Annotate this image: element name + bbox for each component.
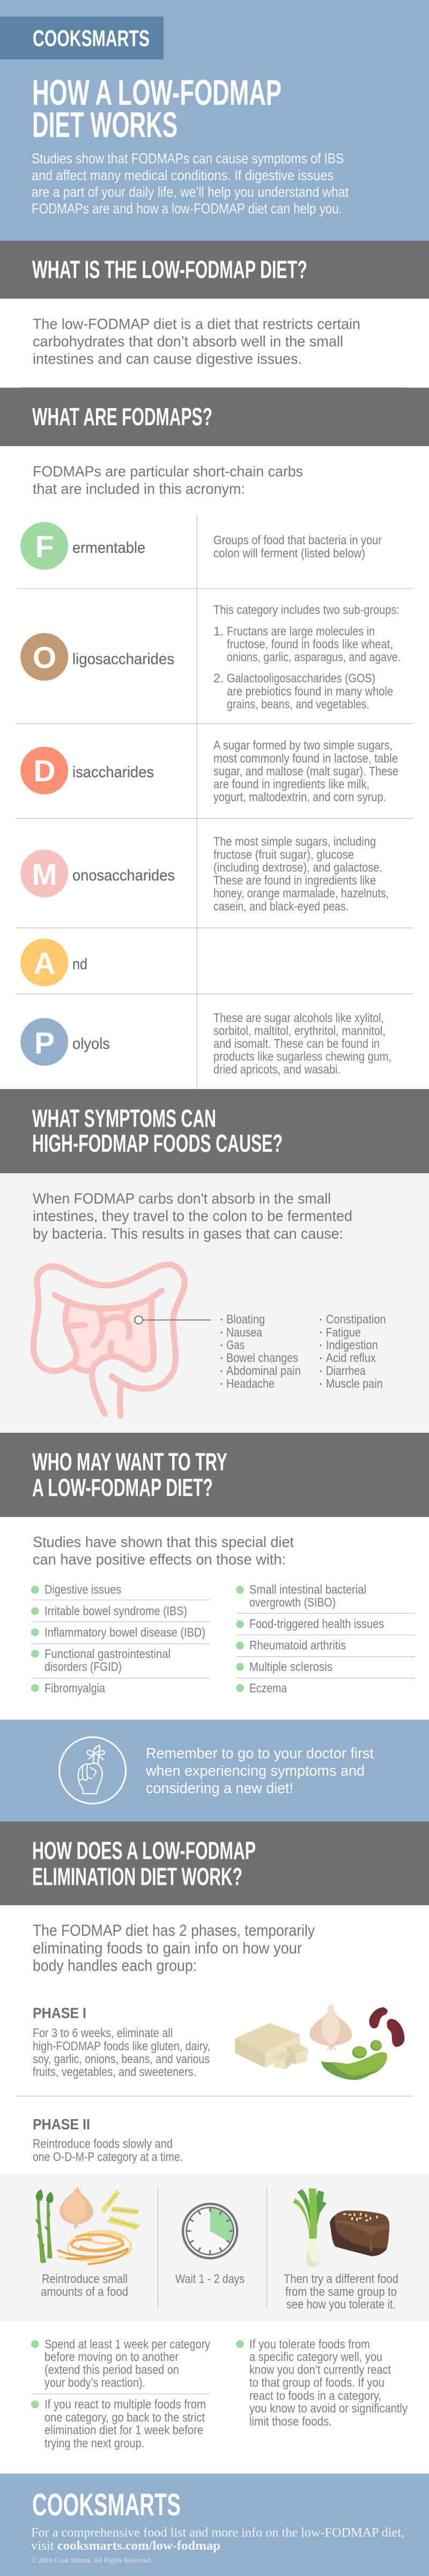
icon: onion: [60, 2186, 93, 2230]
table row: F: Groups of food that bacteria in your: [213, 533, 382, 547]
table row: M: onosaccharides: [72, 867, 175, 884]
table row: P: [20, 1011, 391, 1076]
heading: elimination diet: HOW DOES A LOW-FODMAP: [32, 1837, 256, 1864]
list: conditions right: overgrowth (SIBO): [249, 1595, 336, 1609]
table row: O: grains, beans, and vegetables.: [227, 697, 369, 711]
table row: A: [20, 938, 87, 987]
table row: D: A sugar formed by two simple sugars,: [213, 738, 393, 752]
symptom list: column 2: [320, 1312, 386, 1390]
panel: doctor reminder: [0, 1720, 429, 1822]
intro text: and affect many medical conditions. If digestive issues: [32, 167, 334, 183]
symptom list: column 1: Bloating: [226, 1312, 265, 1326]
text block: definition: [33, 315, 360, 367]
list: phase II tips left: (extend this period based on: [45, 2363, 179, 2377]
list: conditions left: Irritable bowel syndrome (IBS): [45, 1604, 187, 1618]
heading: symptoms: [0, 1089, 429, 1173]
heading: who may want to try: [0, 1433, 429, 1517]
icon: edamame: [321, 2040, 387, 2080]
text block: phase I: soy, garlic, onions, beans, and various: [33, 2052, 210, 2066]
table row: D: yogurt, maltodextrin, and corn syrup.: [213, 790, 386, 804]
text block: two phases: eliminating foods to gain info on how your: [33, 1940, 302, 1957]
table row: O: O: [33, 640, 56, 675]
heading: who may want to try: WHO MAY WANT TO TRY: [32, 1448, 227, 1476]
table row: O: ligosaccharides: [72, 650, 174, 668]
table row: P: sorbitol, maltitol, erythritol, mannitol,: [213, 1024, 386, 1038]
panel: phase II steps: [0, 2174, 429, 2321]
list: conditions right: [236, 1582, 384, 1695]
title: HOW A LOW-FODMAP: [32, 73, 282, 113]
text block: symptoms intro: intestines, they travel to the colon to be fermented: [33, 1208, 352, 1224]
text block: definition: The low-FODMAP diet is a diet that restricts certain: [33, 315, 360, 332]
list: phase II tips right: If you tolerate foods from: [249, 2337, 370, 2351]
illustration: tofu, garlic, beans, edamame: [235, 2004, 404, 2080]
text block: definition: carbohydrates that don’t absorb well in the small: [33, 333, 343, 350]
table row: P: P: [34, 1026, 55, 1061]
list: phase II tips right: you know to avoid or significantly: [249, 2401, 408, 2415]
table row: O: [20, 603, 401, 711]
icon: clock: [183, 2204, 237, 2258]
table row: F: colon will ferment (listed below): [213, 546, 365, 560]
list: conditions right: Food-triggered health issues: [249, 1617, 384, 1631]
text block: phase I: For 3 to 6 weeks, eliminate all: [33, 2026, 173, 2040]
symptom list: column 2: Acid reflux: [326, 1351, 376, 1365]
footer text: [31, 2526, 404, 2565]
text block: two phases: body handles each group:: [33, 1957, 197, 1975]
table row: M: fructose (fruit sugar), glucose: [213, 847, 354, 861]
icon: intestines: [33, 1264, 184, 1416]
intro text: [32, 150, 349, 217]
text block: phase I: PHASE I: [33, 2005, 86, 2022]
heading: elimination diet: [0, 1822, 429, 1905]
heading: symptoms: WHAT SYMPTOMS CAN: [32, 1105, 216, 1132]
list: conditions left: [31, 1582, 205, 1695]
icon: kidney beans: [369, 2007, 404, 2047]
text block: positive effects intro: [33, 1534, 294, 1567]
icon: noodles: [58, 2231, 131, 2264]
text block: definition: intestines and can cause digestive issues.: [33, 351, 302, 367]
text block: two phases: The FODMAP diet has 2 phases, temporarily: [33, 1922, 315, 1940]
table row: M: These are found in ingredients like: [213, 873, 376, 887]
table row: P: olyols: [72, 1035, 110, 1053]
panel: header: [0, 0, 429, 241]
table row: P: products like sugarless chewing gum,: [213, 1049, 391, 1063]
table row: M: The most simple sugars, including: [213, 834, 376, 848]
text block: acronym intro: [33, 463, 303, 497]
symptom list: column 1: Headache: [226, 1376, 275, 1390]
callout line: [135, 1316, 211, 1324]
list: phase II tips left: elimination diet for 1 week before: [45, 2423, 203, 2437]
footer text: © 2018 Cook Smarts. All Rights Reserved.: [31, 2557, 152, 2565]
table row: O: fructose, found in foods like wheat,: [227, 637, 393, 651]
table row: D: D: [33, 754, 56, 788]
intro text: FODMAPs are and how a low-FODMAP diet can help you.: [32, 201, 342, 217]
heading: what are FODMAPs: [0, 388, 429, 446]
table row: D: sugar, and maltose (malt sugar). These: [213, 764, 398, 778]
list: conditions left: Fibromyalgia: [45, 1681, 105, 1695]
list: phase II tips right: to that group of foods. If you: [249, 2375, 384, 2389]
caption: try a different food: see how you tolerate it.: [286, 2297, 396, 2311]
table row: M: honey, orange marmalade, hazelnuts,: [213, 886, 389, 900]
list: conditions right: Rheumatoid arthritis: [249, 1638, 346, 1652]
text block: phase I: [33, 2005, 210, 2078]
table row: O: Fructans are large molecules in: [227, 624, 375, 638]
list: phase II tips right: limit those foods.: [249, 2414, 332, 2428]
footer text: For a comprehensive food list and more info on the low-FODMAP diet,: [31, 2526, 404, 2540]
symptom list: column 1: Abdominal pain: [226, 1364, 301, 1378]
symptom list: column 2: Indigestion: [326, 1338, 378, 1352]
table row: O: are prebiotics found in many whole: [227, 684, 393, 698]
text block: positive effects intro: Studies have shown that this special diet: [33, 1534, 294, 1550]
symptom list: column 1: Gas: [226, 1338, 245, 1352]
list: conditions right: Eczema: [249, 1681, 287, 1695]
text block: reminder: [145, 1745, 374, 1796]
list: phase II tips left: one category, go back to the strict: [45, 2410, 205, 2424]
table row: D: [20, 738, 398, 804]
table row: A: nd: [72, 956, 87, 973]
symptom list: column 2: Diarrhea: [326, 1364, 366, 1378]
table row: P: dried apricots, and wasabi.: [213, 1062, 341, 1076]
table row: O: Galactooligosaccharides (GOS): [227, 671, 375, 685]
table row: F: [20, 522, 382, 569]
text block: reminder: when experiencing symptoms and: [145, 1763, 365, 1779]
icon: asparagus: [36, 2189, 53, 2263]
list: conditions left: disorders (FGID): [45, 1660, 122, 1674]
text block: acronym intro: FODMAPs are particular short-chain carbs: [33, 463, 303, 479]
caption: wait: Wait 1 - 2 days: [175, 2272, 245, 2286]
logo box: [0, 17, 164, 60]
text block: symptoms intro: When FODMAP carbs don't absorb in the small: [33, 1190, 331, 1207]
icon: leek: [293, 2188, 327, 2267]
list: conditions left: Digestive issues: [45, 1582, 121, 1596]
table row: F: ermentable: [72, 539, 145, 557]
table row: F: F: [35, 530, 54, 564]
list: phase II tips right: a specific category well, you: [249, 2350, 382, 2364]
panel: symptoms: [0, 1173, 429, 1433]
text block: phase II: PHASE II: [33, 2116, 90, 2133]
title: DIET WORKS: [32, 105, 177, 145]
caption: try a different food: Then try a different food: [284, 2272, 398, 2286]
table row: P: These are sugar alcohols like xylitol,: [213, 1011, 384, 1025]
table row: M: M: [32, 857, 57, 892]
text block: phase II: one O-D-M-P category at a time.: [33, 2150, 183, 2164]
caption: reintroduce: Reintroduce small: [42, 2272, 128, 2286]
text block: phase II: Reintroduce foods slowly and: [33, 2137, 173, 2151]
icon: bread: [330, 2210, 389, 2256]
heading: elimination diet: ELIMINATION DIET WORK?: [32, 1863, 242, 1891]
table row: M: casein, and black-eyed peas.: [213, 899, 349, 913]
table row: A: A: [33, 946, 56, 981]
caption: reintroduce: [41, 2272, 128, 2298]
table row: O: onions, garlic, asparagus, and agave.: [227, 650, 401, 664]
intro text: Studies show that FODMAPs can cause symptoms of IBS: [32, 150, 344, 166]
list: phase II tips left: trying the next group.: [45, 2436, 144, 2450]
list: phase II tips right: react to foods in a category,: [249, 2388, 381, 2402]
text block: phase I: high-FODMAP foods like gluten, dairy,: [33, 2039, 210, 2053]
logo box: COOKSMARTS: [33, 26, 150, 51]
icon: leek and bread: [293, 2188, 389, 2267]
list: phase II tips left: before moving on to another: [45, 2350, 179, 2364]
heading: who may want to try: A LOW-FODMAP DIET?: [32, 1474, 213, 1501]
text block: phase I: fruits, vegetables, and sweeteners.: [33, 2064, 196, 2078]
list: phase II tips left: If you react to multiple foods from: [45, 2397, 206, 2411]
table row: O: 2.: [213, 671, 224, 685]
list: conditions left: Inflammatory bowel disease (IBD): [45, 1625, 205, 1639]
text block: reminder: Remember to go to your doctor first: [146, 1745, 374, 1761]
text block: positive effects intro: can have positive effects on those with:: [33, 1551, 286, 1567]
icon: penne: [101, 2189, 140, 2230]
list: conditions right: Small intestinal bacterial: [249, 1582, 366, 1596]
list: phase II tips left: [31, 2337, 210, 2450]
text block: symptoms intro: by bacteria. This results in gases that can cause:: [33, 1225, 343, 1242]
caption: try a different food: [284, 2272, 398, 2311]
illustration: reintroduce foods: [36, 2186, 140, 2264]
footer text: visit cooksmarts.com/low-fodmap: [31, 2539, 220, 2553]
symptom list: column 2: Fatigue: [326, 1325, 361, 1339]
caption: reintroduce: amounts of a food: [41, 2284, 128, 2298]
symptom list: column 2: Constipation: [326, 1312, 386, 1326]
icon: finger with ribbon: [60, 1737, 126, 1804]
list: conditions left: Functional gastrointestinal: [45, 1647, 171, 1661]
list: phase II tips left: Spend at least 1 week per category: [45, 2337, 210, 2351]
table row: P: and isomalt. These can be found in: [213, 1037, 380, 1050]
symptom list: column 2: Muscle pain: [326, 1376, 383, 1390]
list: phase II tips right: know you don’t currently react: [249, 2363, 391, 2377]
list: conditions right: Multiple sclerosis: [249, 1660, 332, 1674]
table row: D: are found in ingredients like milk,: [213, 777, 369, 791]
heading: symptoms: HIGH-FODMAP FOODS CAUSE?: [32, 1129, 283, 1157]
text block: acronym intro: that are included in this acronym:: [33, 480, 245, 497]
table row: M: [20, 834, 389, 913]
table row: O: This category includes two sub-groups:: [213, 603, 400, 617]
icon: tofu: [235, 2023, 309, 2069]
icon: garlic: [309, 2004, 352, 2051]
table row: O: 1.: [213, 624, 224, 638]
symptom list: column 1: Nausea: [226, 1325, 262, 1339]
caption: try a different food: from the same group to: [285, 2284, 397, 2298]
text block: reminder: considering a new diet!: [146, 1780, 293, 1796]
text block: two phases: [33, 1922, 315, 1975]
symptom list: column 1: Bowel changes: [226, 1351, 298, 1365]
heading: what are FODMAPs: WHAT ARE FODMAPS?: [32, 403, 212, 431]
list: phase II tips left: your body’s reaction).: [45, 2375, 145, 2389]
title: [32, 73, 282, 145]
footer logo: COOKSMARTS: [32, 2488, 181, 2522]
table row: D: isaccharides: [72, 764, 154, 781]
symptom list: column 1: [220, 1312, 301, 1390]
list: phase II tips right: [236, 2337, 408, 2428]
intro text: are a part of your daily life, we’ll help you understand what: [32, 184, 349, 200]
table row: M: (including dextrose), and galactose.: [213, 860, 382, 874]
table row: D: most commonly found in lactose, table: [213, 751, 398, 765]
text block: phase II: [33, 2116, 183, 2164]
text block: symptoms intro: [33, 1190, 352, 1242]
panel: footer: [0, 2474, 429, 2576]
heading: what is the low-FODMAP diet: [0, 241, 429, 299]
